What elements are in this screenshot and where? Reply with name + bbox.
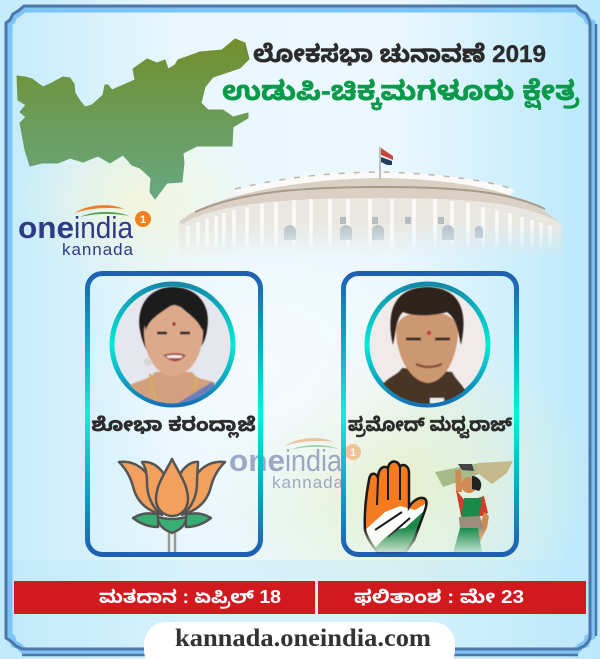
flag (380, 147, 393, 179)
candidate 2 name: ಪ್ರಮೋದ್ ಮಧ್ವರಾಜ್ (348, 415, 513, 439)
banner: polling date (14, 581, 315, 614)
portrait 2 (367, 284, 488, 410)
logo: oneindia kannada: india (74, 210, 134, 245)
banner: result date: ಫಲಿತಾಂಶ : ಮೇ 23 (354, 587, 524, 607)
candidate 1 name: ಶೋಭಾ ಕರಂದ್ಲಾಜೆ (92, 415, 256, 438)
icon: farmer woman (435, 461, 513, 553)
map of constituency (17, 39, 249, 199)
logo: oneindia kannada (18, 205, 151, 259)
logo: oneindia kannada: kannada (62, 240, 134, 259)
banner: result date (318, 581, 586, 614)
icon: lotus (119, 459, 225, 552)
watermark logo: 1 (350, 447, 356, 459)
watermark logo: one (229, 443, 285, 478)
logo: oneindia kannada: 1 (140, 214, 146, 226)
website pill (144, 622, 455, 659)
banner: polling date: ಮತದಾನ : ಏಪ್ರಿಲ್ 18 (99, 587, 281, 609)
panel: candidate 1 (88, 274, 260, 554)
icon: congress hand (364, 460, 428, 554)
website pill: kannada.oneindia.com (175, 625, 431, 652)
logo: oneindia kannada: one (18, 210, 74, 245)
title line 2: ಉಡುಪಿ-ಚಿಕ್ಕಮಗಳೂರು ಕ್ಷೇತ್ರ (222, 76, 579, 111)
title line 1: ಲೋಕಸಭಾ ಚುನಾವಣೆ 2019 (253, 41, 546, 68)
watermark logo: kannada (272, 473, 344, 492)
watermark logo: india (285, 443, 343, 478)
parliament building (179, 147, 562, 258)
portrait 1 (112, 284, 233, 410)
panel: candidate 2 (344, 274, 516, 555)
watermark logo (229, 438, 361, 492)
